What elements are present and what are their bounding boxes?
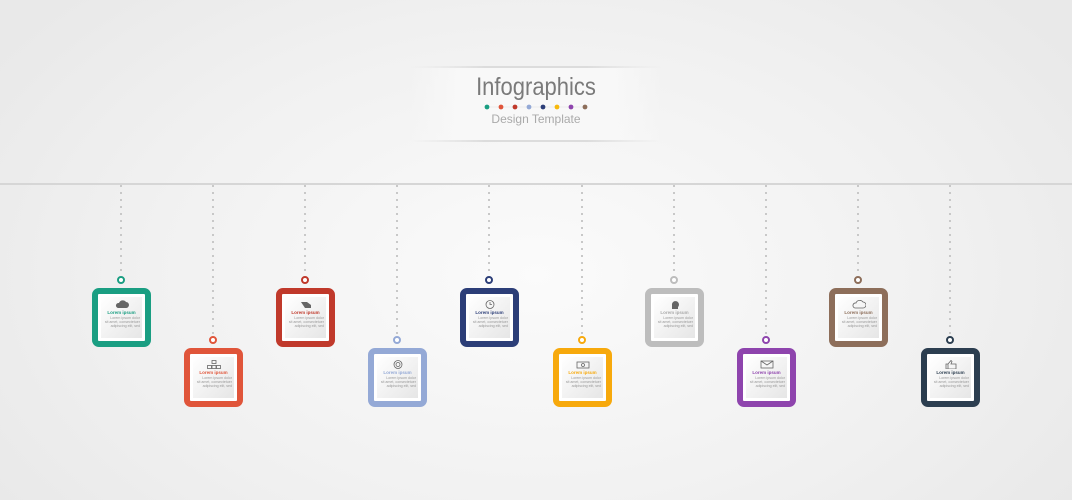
card 10: sit amet, consectetuer [934,380,969,384]
step 5 [460,185,519,347]
card 10: Lorem ipsum [936,370,965,375]
card 4: Lorem ipsum [383,370,412,375]
card 7: adipiscing elit, sed [664,324,693,328]
card 5: Lorem ipsum [475,310,504,315]
card 5 [460,288,519,347]
card 3: sit amet, consectetuer [289,320,324,324]
card 1: adipiscing elit, sed [111,324,140,328]
card 5: sit amet, consectetuer [473,320,508,324]
icon: head [672,301,679,309]
card 4: Lorem ipsum dolor [386,376,416,380]
card 2 [184,348,243,407]
card 9: adipiscing elit, sed [848,324,877,328]
card 5: Lorem ipsum dolor [478,316,508,320]
card 3: Lorem ipsum [291,310,320,315]
card 2: sit amet, consectetuer [197,380,232,384]
color dots [484,104,588,110]
title block [410,66,662,142]
horizontal rail [0,183,1072,185]
card 6: adipiscing elit, sed [572,384,601,388]
card 7: Lorem ipsum dolor [663,316,693,320]
icon: clock [486,300,494,309]
card 10 [921,348,980,407]
card 6: Lorem ipsum dolor [571,376,601,380]
card 7 [645,288,704,347]
card 7: Lorem ipsum [660,310,689,315]
step 6 [553,185,612,407]
step 10 [921,185,980,407]
icon: target [394,360,402,369]
card 9 [829,288,888,347]
subtitle: Design Template [491,112,581,126]
step 8 [737,185,796,407]
step 1 [92,185,151,347]
icon: hand [301,302,311,308]
card 8: Lorem ipsum [752,370,781,375]
step 4 [368,185,427,407]
icon: cloud [116,300,129,308]
card 9: Lorem ipsum dolor [847,316,877,320]
icon: cloud outline [852,300,866,308]
card 4: sit amet, consectetuer [381,380,416,384]
card 3 [276,288,335,347]
card 9: sit amet, consectetuer [842,320,877,324]
card 7: sit amet, consectetuer [658,320,693,324]
icon: envelope [760,360,774,368]
step 3 [276,185,335,347]
card 10: adipiscing elit, sed [940,384,969,388]
icon: hierarchy [207,360,221,369]
card 5: adipiscing elit, sed [479,324,508,328]
card 3: adipiscing elit, sed [295,324,324,328]
card 6: Lorem ipsum [568,370,597,375]
card 8 [737,348,796,407]
step 2 [184,185,243,407]
card 6 [553,348,612,407]
card 9: Lorem ipsum [844,310,873,315]
card 1: Lorem ipsum dolor [110,316,140,320]
card 10: Lorem ipsum dolor [939,376,969,380]
card 4: adipiscing elit, sed [387,384,416,388]
card 1 [92,288,151,347]
card 2: adipiscing elit, sed [203,384,232,388]
card 2: Lorem ipsum dolor [202,376,232,380]
step 9 [829,185,888,347]
step 7 [645,185,704,347]
card 4 [368,348,427,407]
card 2: Lorem ipsum [199,370,228,375]
icon: thumbs up [946,360,956,369]
card 1: sit amet, consectetuer [105,320,140,324]
card 8: Lorem ipsum dolor [755,376,785,380]
card 8: sit amet, consectetuer [750,380,785,384]
card 3: Lorem ipsum dolor [294,316,324,320]
card 1: Lorem ipsum [107,310,136,315]
card 6: sit amet, consectetuer [566,380,601,384]
heading: Infographics [476,73,596,101]
card 8: adipiscing elit, sed [756,384,785,388]
icon: money [576,362,590,368]
